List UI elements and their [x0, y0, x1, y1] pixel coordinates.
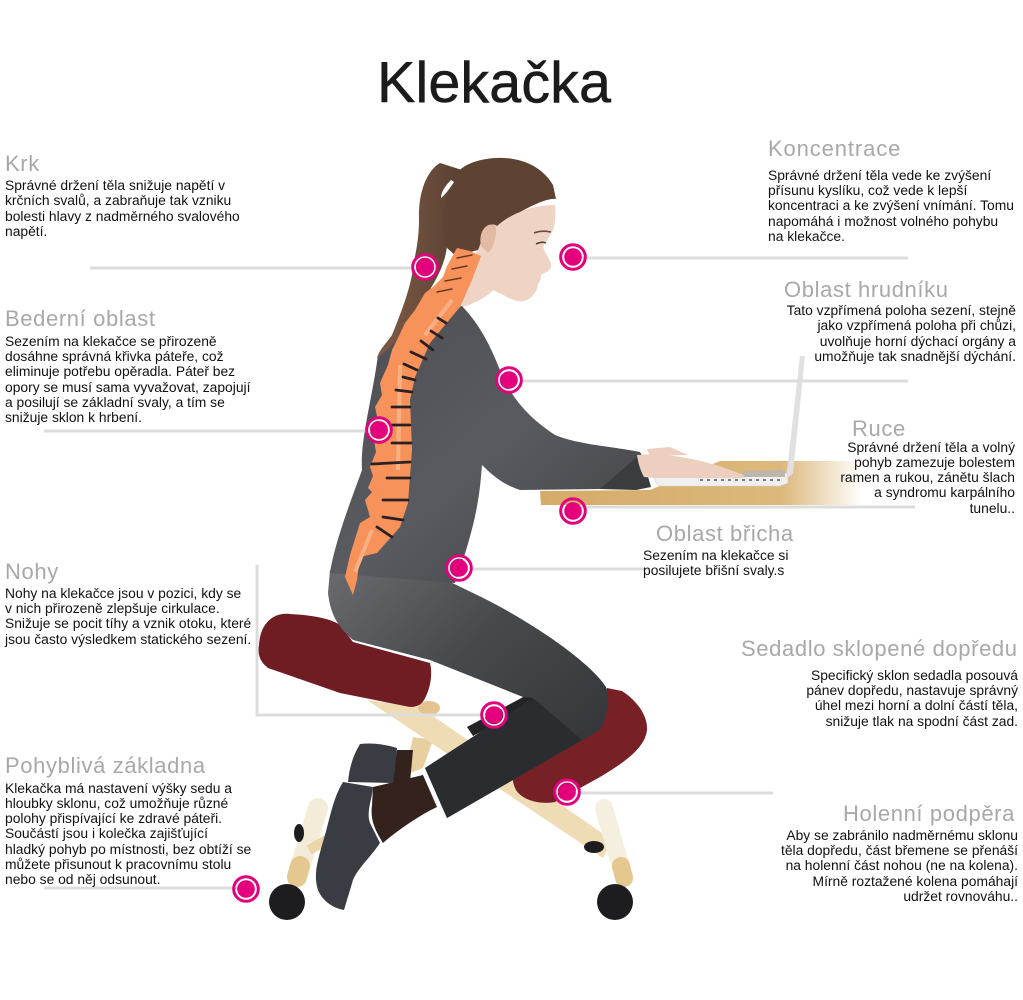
body: Správné držení těla snižuje napětí v [5, 177, 225, 193]
front shin cushion [513, 688, 647, 803]
body: napětí. [5, 223, 47, 239]
body: posilujete břišní svaly.s [643, 562, 784, 578]
body: pánev dopředu, nastavuje správný [806, 682, 1018, 698]
body: uvolňuje horní dýchací orgány a [820, 333, 1016, 349]
body: Součástí jsou i kolečka zajišťující [5, 825, 208, 841]
desk [540, 461, 862, 505]
body: udržet rovnováhu.. [903, 888, 1018, 904]
face and neck [450, 205, 555, 307]
body: na klekačce. [768, 228, 845, 244]
laptop [655, 356, 805, 486]
wheels [269, 824, 633, 920]
heading: Nohy [5, 559, 59, 584]
body: koncentraci a ke zvýšení vnímání. Tomu [768, 197, 1014, 213]
connector lines [44, 258, 915, 888]
body: Sezením na klekačce si [643, 547, 788, 563]
body: hladký pohyb po místnosti, bez obtíží se [5, 841, 252, 857]
heading: Pohyblivá základna [5, 753, 206, 778]
text block: Nohy [4, 559, 252, 647]
text block: Bederní oblast [5, 306, 251, 425]
marker: chest [497, 368, 521, 392]
marker: abdomen [447, 556, 471, 580]
body: snižuje tlak na spodní část zad. [826, 713, 1018, 729]
hair and ponytail [377, 158, 556, 358]
rear seat cushion [259, 614, 431, 707]
body: hloubky sklonu, což umožňuje různé [5, 795, 228, 811]
title: Klekačka [377, 51, 611, 115]
illustration: woman on kneeling chair [259, 158, 862, 920]
marker: legs [482, 703, 506, 727]
body: napomáhá i možnost volného pohybu [768, 213, 998, 229]
heading: Bederní oblast [5, 306, 156, 331]
body: tunelu.. [970, 500, 1015, 516]
body: dosáhne správná křivka páteře, což [5, 348, 224, 364]
text block: Koncentrace [768, 136, 1014, 244]
marker: shin support [555, 780, 579, 804]
marker: neck [413, 255, 437, 279]
marker: concentration [561, 245, 585, 269]
body: jsou často výsledkem statického sezení. [4, 631, 251, 647]
text block: Ruce [840, 416, 1015, 516]
socks [372, 750, 437, 843]
body: polohy přispívající ke zdravé páteři. [5, 810, 222, 826]
body: snižuje sklon k hrbení. [5, 409, 142, 425]
body: na holenní část nohou (ne na kolena). [786, 857, 1018, 873]
body: Tato vzpřímená poloha sezení, stejně [787, 302, 1016, 318]
marker: hands [561, 499, 585, 523]
shoes [316, 744, 397, 910]
heading: Krk [5, 151, 40, 176]
body: Snižuje se pocit tíhy a vznik otoku, které [5, 615, 252, 631]
text block: Pohyblivá základna [5, 753, 252, 887]
body: ramen a rukou, zánětu šlach [840, 469, 1015, 485]
text block: Sedadlo sklopené dopředu [741, 636, 1018, 729]
spine [345, 248, 481, 595]
hands [637, 447, 744, 478]
body: bolesti hlavy z nadměrného svalového [5, 208, 240, 224]
body: eliminuje potřebu opěradla. Páteř bez [5, 363, 235, 379]
body: umožňuje tak snadnější dýchání. [814, 348, 1016, 364]
body: Specifický sklon sedadla posouvá [811, 667, 1018, 683]
body: Mírně roztažené kolena pomáhají [813, 873, 1018, 889]
body: těla dopředu, část břemene se přenáší [781, 842, 1018, 858]
body: Aby se zabránilo nadměrnému sklonu [786, 827, 1018, 843]
text block: Oblast břicha [643, 521, 794, 578]
body: krčních svalů, a zabraňuje tak vzniku [5, 192, 231, 208]
trousers [328, 570, 608, 818]
body: nebo se od něj odsunout. [5, 871, 160, 887]
heading: Koncentrace [768, 136, 901, 161]
body: můžete přisunout k pracovnímu stolu [5, 856, 231, 872]
body: jako vzpřímená poloha při chůzi, [816, 317, 1016, 333]
body: a syndromu karpálního [874, 484, 1015, 500]
body: úhel mezi horní a dolní částí těla, [815, 697, 1018, 713]
heading: Holenní podpěra [843, 801, 1015, 826]
text block: Holenní podpěra [781, 801, 1018, 904]
marker: lower back [367, 418, 391, 442]
body: opory se musí sama vyvažovat, zapojují [5, 379, 251, 395]
wooden chair frame [297, 700, 624, 878]
torso with sleeve [330, 306, 651, 583]
body: Klekačka má nastavení výšky sedu a [5, 780, 232, 796]
body: pohyb zamezuje bolestem [854, 454, 1015, 470]
text block: Oblast hrudníku [784, 277, 1016, 364]
body: a posilují se základní svaly, a tím se [5, 394, 225, 410]
heading: Oblast hrudníku [784, 277, 949, 302]
text block: Krk [5, 151, 240, 239]
body: Správné držení těla a volný [847, 439, 1015, 455]
ear and eye [480, 224, 551, 253]
heading: Ruce [852, 416, 906, 441]
body: v nich přirozeně zlepšuje cirkulace. [5, 600, 220, 616]
heading: Oblast břicha [656, 521, 794, 546]
body: Nohy na klekačce jsou v pozici, kdy se [5, 585, 242, 601]
body: Správné držení těla vede ke zvýšení [768, 167, 991, 183]
heading: Sedadlo sklopené dopředu [741, 636, 1018, 661]
body: Sezením na klekačce se přirozeně [5, 333, 217, 349]
body: přísunu kyslíku, což vede k lepší [768, 182, 967, 198]
marker: base [234, 877, 258, 901]
